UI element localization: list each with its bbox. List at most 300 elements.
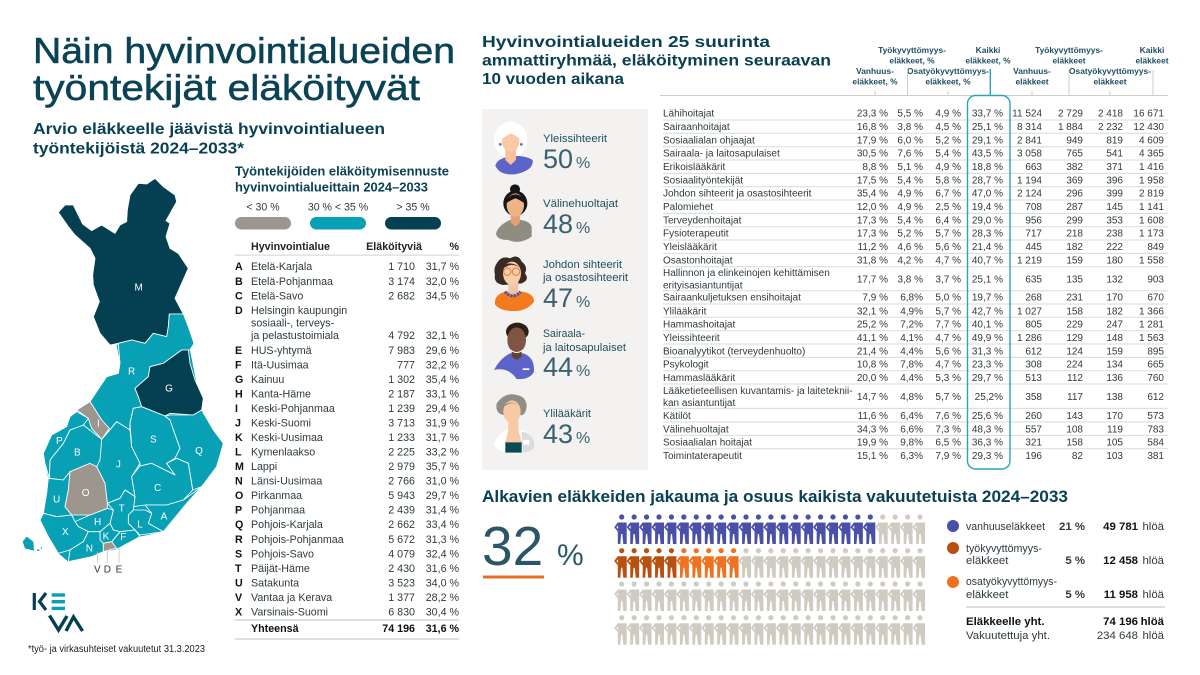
- map letters: B: [74, 448, 81, 459]
- row I: I: [235, 403, 238, 415]
- label: Yleissihteerit: [543, 133, 608, 145]
- label: Ylilääkärit: [543, 408, 592, 420]
- row S: 4 079: [388, 548, 415, 560]
- row N: 2 766: [388, 476, 415, 488]
- row: Bioanalyytikot (terveydenhuolto): [663, 346, 805, 357]
- title: [33, 30, 455, 108]
- row F: Itä-Uusimaa: [251, 360, 309, 372]
- row: Terveydenhoitajat: [663, 215, 742, 226]
- row: 40,1 %: [972, 320, 1003, 331]
- row: 268: [1025, 293, 1042, 304]
- row J: Keski-Suomi: [251, 418, 311, 430]
- row: [663, 149, 1164, 160]
- row: 612: [1025, 346, 1042, 357]
- row: 573: [1147, 411, 1164, 422]
- row I: [235, 403, 459, 415]
- value: %: [576, 155, 590, 172]
- item: partial disability: 11 958: [1104, 589, 1138, 601]
- map letters: O: [82, 488, 90, 499]
- row H: Kanta-Häme: [251, 388, 311, 400]
- row P: Pohjanmaa: [251, 505, 305, 517]
- row: 29,7 %: [972, 373, 1003, 384]
- row: 1 286: [1017, 333, 1042, 344]
- row K: 1 233: [388, 432, 415, 444]
- row: 12,0 %: [857, 202, 888, 213]
- row: 2,5 %: [935, 202, 961, 213]
- row: 43,5 %: [972, 149, 1003, 160]
- totals: [966, 616, 1165, 642]
- row: 41,1 %: [857, 333, 888, 344]
- row O: O: [235, 490, 243, 502]
- row: Psykologit: [663, 360, 709, 371]
- row: 105: [1106, 438, 1123, 449]
- row D: 4 792: [388, 330, 415, 342]
- value: 44: [543, 352, 573, 382]
- map letters: M: [135, 283, 143, 294]
- row: [663, 320, 1164, 331]
- row B: [235, 276, 459, 288]
- row: 7,6 %: [897, 149, 923, 160]
- southern silhouette: [40, 314, 223, 562]
- column headers: eläkkeet: [1135, 56, 1169, 66]
- row: 25,1 %: [972, 274, 1003, 285]
- heading: left section: [33, 121, 385, 158]
- table header: Eläköityviä: [366, 241, 422, 253]
- column headers: eläkkeet: [1093, 76, 1127, 86]
- row: 19,7 %: [972, 293, 1003, 304]
- column headers: Vanhuus-: [856, 66, 894, 76]
- row 1: old-age pensions: [614, 514, 925, 544]
- row I: 29,4 %: [426, 403, 459, 415]
- value: 47: [543, 283, 573, 313]
- item: partial disability: [947, 576, 1165, 601]
- row: 238: [1106, 229, 1123, 240]
- row: Lääketieteellisen kuvantamis- ja laiteteknii-: [663, 386, 853, 397]
- row H: [235, 388, 459, 400]
- row: 17,9 %: [857, 135, 888, 146]
- column headers: Työkyvyttömyys-: [1035, 45, 1103, 55]
- row: [663, 333, 1164, 344]
- row: 12 430: [1133, 122, 1164, 133]
- heading: distribution: Alkavien eläkkeiden jakauma ja osuus kaikista vakuutetuista 2024–2033: [482, 488, 1068, 506]
- row: [663, 109, 1164, 120]
- region R: Pohjois-Pohjanmaa: [90, 314, 194, 432]
- value: 43: [543, 419, 573, 449]
- row: 956: [1025, 215, 1042, 226]
- row E: [235, 345, 459, 357]
- column headers: eläkkeet, %: [965, 56, 1011, 66]
- row: 5,2 %: [935, 135, 961, 146]
- region G: Kainuu: [135, 350, 203, 416]
- row E: 29,6 %: [426, 345, 459, 357]
- row: 369: [1066, 175, 1083, 186]
- row: 1 219: [1017, 255, 1042, 266]
- totals: hlöä: [1141, 616, 1165, 628]
- legend: percentage classes: 30 % < 35 %: [308, 202, 369, 214]
- item: partial disability: hlöä: [1142, 589, 1165, 601]
- row: [663, 451, 1164, 462]
- label: [542, 259, 629, 284]
- row M: 35,7 %: [426, 461, 459, 473]
- row: [663, 411, 1164, 422]
- row X: [235, 606, 459, 618]
- persona: Ylilääkärit: [494, 394, 592, 453]
- row: kan asiantuntijat: [663, 398, 735, 409]
- row: 6,4%: [900, 411, 923, 422]
- item: old-age: vanhuuseläkkeet: [966, 521, 1046, 533]
- title: työntekijät eläköityvät: [33, 67, 420, 108]
- row: 612: [1147, 392, 1164, 403]
- label: [542, 328, 627, 354]
- heading: occupational groups: [482, 34, 831, 88]
- row: 23,3 %: [972, 360, 1003, 371]
- row A: Etelä-Karjala: [251, 261, 312, 273]
- row: 5,1 %: [897, 162, 923, 173]
- regions in teal: [40, 407, 223, 562]
- value: [543, 283, 590, 313]
- row: 247: [1106, 320, 1123, 331]
- row: Palomiehet: [663, 202, 713, 213]
- row: Hallinnon ja elinkeinojen kehittämisen: [663, 268, 830, 279]
- row: 182: [1106, 306, 1123, 317]
- row: 819: [1106, 135, 1123, 146]
- row: 36,3 %: [972, 438, 1003, 449]
- row V: 28,2 %: [426, 592, 459, 604]
- row: 48,3 %: [972, 424, 1003, 435]
- row: 4,6 %: [897, 242, 923, 253]
- row: [663, 360, 1164, 371]
- row: 3,7 %: [935, 274, 961, 285]
- row: 135: [1066, 274, 1083, 285]
- row J: 31,9 %: [426, 418, 459, 430]
- row: 1 884: [1058, 122, 1083, 133]
- row: 5,7 %: [935, 229, 961, 240]
- table header: %: [449, 241, 459, 253]
- row I: 1 239: [388, 403, 415, 415]
- column headers: Osatyökyvyttömyys-: [907, 66, 989, 76]
- row F: 777: [397, 360, 415, 372]
- row D: D: [235, 305, 243, 317]
- row: 5,7 %: [935, 392, 961, 403]
- heading: left section: työntekijöistä 2024–2033*: [33, 140, 245, 158]
- row: 231: [1066, 293, 1083, 304]
- table header: Hyvinvointialue: [251, 241, 330, 253]
- Åland islands: [23, 537, 42, 551]
- row: 42,7 %: [972, 306, 1003, 317]
- map letters: C: [154, 483, 161, 494]
- row: 353: [1106, 215, 1123, 226]
- row P: P: [235, 505, 242, 517]
- row: 229: [1066, 320, 1083, 331]
- region O: Pirkanmaa: [65, 463, 107, 515]
- row: 132: [1106, 274, 1123, 285]
- leader lines: [97, 548, 119, 563]
- row: 895: [1147, 346, 1164, 357]
- row: 1 141: [1139, 202, 1164, 213]
- column headers: eläkkeet: [1015, 76, 1049, 86]
- row V: Vantaa ja Kerava: [251, 592, 332, 604]
- row: 158: [1066, 438, 1083, 449]
- table: wellbeing counties: [235, 241, 459, 640]
- row: 28,3 %: [972, 229, 1003, 240]
- row K: Keski-Uusimaa: [251, 432, 323, 444]
- row N: 31,0 %: [426, 476, 459, 488]
- row: Yleislääkärit: [663, 242, 717, 253]
- row L: [235, 447, 459, 459]
- value: %: [576, 294, 590, 311]
- map letters: F: [120, 532, 126, 543]
- label: ja osastosihteerit: [542, 272, 629, 284]
- row: [663, 438, 1164, 449]
- heading: forecast table: hyvinvointialueittain 2024–2033: [235, 180, 428, 194]
- column headers: eläkkeet, %: [852, 76, 898, 86]
- row: Sairaala- ja laitosapulaiset: [663, 149, 780, 160]
- row: 25,6 %: [972, 411, 1003, 422]
- map letters: G: [165, 384, 173, 395]
- row: Lähihoitajat: [663, 109, 714, 120]
- row: 138: [1106, 392, 1123, 403]
- map letters: L: [137, 520, 143, 531]
- capital region: [103, 542, 117, 552]
- row: erityisasiantuntijat: [663, 280, 743, 291]
- row: 308: [1025, 360, 1042, 371]
- row: 7,9 %: [935, 451, 961, 462]
- item: disability: hlöä: [1142, 555, 1165, 567]
- row H: 2 187: [388, 388, 415, 400]
- row: 23,3 %: [857, 109, 888, 120]
- row: 25,2 %: [857, 320, 888, 331]
- row B: 32,0 %: [426, 276, 459, 288]
- row B: B: [235, 276, 243, 288]
- row: 849: [1147, 242, 1164, 253]
- row: 2 418: [1098, 109, 1123, 120]
- row O: 29,7 %: [426, 490, 459, 502]
- row H: H: [235, 388, 243, 400]
- row: 4,9 %: [935, 162, 961, 173]
- row 3: [614, 581, 925, 611]
- row M: Lappi: [251, 461, 277, 473]
- map letters: V: [94, 564, 101, 575]
- row: Toimintaterapeutit: [663, 451, 742, 462]
- row: 34,3 %: [857, 424, 888, 435]
- map letters: D: [104, 564, 111, 575]
- row R: [235, 534, 459, 546]
- row: 7,9 %: [862, 293, 888, 304]
- row A: 31,7 %: [426, 261, 459, 273]
- row: 4,9%: [900, 306, 923, 317]
- row B: Etelä-Pohjanmaa: [251, 276, 333, 288]
- row U: 3 523: [388, 577, 415, 589]
- row: 17,5 %: [857, 175, 888, 186]
- column headers: [852, 45, 1169, 86]
- row L: Kymenlaakso: [251, 447, 315, 459]
- row L: L: [235, 447, 242, 459]
- persona: Sairaala- ja laitosapulaiset: [494, 323, 627, 382]
- row: Sosiaalialan hoitajat: [663, 438, 752, 449]
- row A: 1 710: [388, 261, 415, 273]
- row: [663, 424, 1164, 435]
- row C: 2 682: [388, 290, 415, 302]
- row: 4,7 %: [935, 360, 961, 371]
- row: 1 281: [1139, 320, 1164, 331]
- row: 8 314: [1017, 122, 1042, 133]
- row: 4,5 %: [935, 122, 961, 133]
- row: 17,7 %: [857, 274, 888, 285]
- row: 783: [1147, 424, 1164, 435]
- row: 25,2%: [975, 392, 1003, 403]
- row: Sosiaalityöntekijät: [663, 175, 743, 186]
- heading: forecast table: [235, 164, 449, 194]
- row: [663, 268, 1164, 291]
- persona: Johdon sihteerit: [494, 256, 629, 313]
- row: Välinehuoltajat: [663, 424, 729, 435]
- row: [663, 373, 1164, 384]
- row total: 31,6 %: [426, 623, 459, 635]
- row T: T: [235, 563, 242, 575]
- label: Johdon sihteerit: [543, 259, 623, 271]
- row N: [235, 476, 459, 488]
- map letters: [53, 283, 203, 575]
- legend: percentage classes: > 35 %: [396, 202, 430, 214]
- map letters: T: [119, 504, 125, 515]
- totals: Eläkkeelle yht.: [966, 616, 1045, 628]
- row: 6,3%: [900, 451, 923, 462]
- map letters: X: [62, 527, 69, 538]
- row: 1 608: [1139, 215, 1164, 226]
- row: 287: [1066, 202, 1083, 213]
- row: 541: [1106, 149, 1123, 160]
- row: 1 027: [1017, 306, 1042, 317]
- row K: K: [235, 432, 243, 444]
- map letters: H: [94, 517, 101, 528]
- big number: 32 %: %: [557, 539, 584, 572]
- column headers: Vanhuus-: [1013, 66, 1051, 76]
- row: 708: [1025, 202, 1042, 213]
- row S: Pohjois-Savo: [251, 548, 314, 560]
- row: Sosiaalialan ohjaajat: [663, 135, 755, 146]
- table: occupational groups: [663, 109, 1164, 462]
- row X: 6 830: [388, 606, 415, 618]
- row Q: Pohjois-Karjala: [251, 519, 323, 531]
- row: 33,7 %: [972, 109, 1003, 120]
- row: 11,2 %: [858, 242, 888, 253]
- row X: X: [235, 606, 243, 618]
- value: %: [576, 430, 590, 447]
- row: 665: [1147, 360, 1164, 371]
- row: 17,3 %: [857, 215, 888, 226]
- pictogram: 100 insured persons: [614, 514, 925, 645]
- row: 16,8 %: [857, 122, 888, 133]
- row: [663, 242, 1164, 253]
- row: [663, 306, 1164, 317]
- row: 4,9 %: [897, 189, 923, 200]
- map letters: U: [53, 494, 60, 505]
- row Q: Q: [235, 519, 243, 531]
- row Q: 33,4 %: [426, 519, 459, 531]
- row: 3,8 %: [897, 122, 923, 133]
- item: partial disability: eläkkeet: [966, 589, 1009, 601]
- row: 10,8 %: [857, 360, 888, 371]
- row X: Varsinais-Suomi: [251, 606, 328, 618]
- column headers: Osatyökyvyttömyys-: [1069, 66, 1151, 76]
- row: Osastonhoitajat: [663, 255, 733, 266]
- row F: 32,2 %: [426, 360, 459, 372]
- row: 170: [1106, 411, 1123, 422]
- row: 170: [1106, 293, 1123, 304]
- map letters: K: [103, 531, 110, 542]
- row J: [235, 418, 459, 430]
- value: [543, 419, 590, 449]
- row R: 31,3 %: [426, 534, 459, 546]
- row: 717: [1025, 229, 1042, 240]
- row D: [235, 305, 459, 342]
- row M: 2 979: [388, 461, 415, 473]
- row V: V: [235, 592, 243, 604]
- row: 35,4 %: [857, 189, 888, 200]
- row: Yleissihteerit: [663, 333, 720, 344]
- row C: [235, 290, 459, 302]
- row: 760: [1147, 373, 1164, 384]
- map letters: A: [161, 511, 168, 522]
- row C: Etelä-Savo: [251, 290, 303, 302]
- row: 765: [1066, 149, 1083, 160]
- row: [663, 255, 1164, 266]
- legend: percentage classes: < 30 %: [246, 202, 280, 214]
- row: 224: [1066, 360, 1083, 371]
- highlight: all pensions column: [968, 69, 1010, 469]
- heading: occupational groups: ammattiryhmää, eläköityminen seuraavan: [482, 52, 831, 70]
- row U: U: [235, 577, 243, 589]
- row: 6,0 %: [897, 135, 923, 146]
- row: 1 958: [1139, 175, 1164, 186]
- row: 103: [1106, 451, 1123, 462]
- row: 19,4 %: [972, 202, 1003, 213]
- row J: J: [235, 418, 241, 430]
- row: 49,9 %: [972, 333, 1003, 344]
- row: 1 558: [1139, 255, 1164, 266]
- row: 6,7 %: [935, 189, 961, 200]
- row V: [235, 592, 459, 604]
- row: 20,0 %: [857, 373, 888, 384]
- row: 670: [1147, 293, 1164, 304]
- row: 2 729: [1058, 109, 1083, 120]
- row R: Pohjois-Pohjanmaa: [251, 534, 344, 546]
- row: 180: [1106, 255, 1123, 266]
- row: 31,3 %: [972, 346, 1003, 357]
- row E: HUS-yhtymä: [251, 345, 312, 357]
- row C: 34,5 %: [426, 290, 459, 302]
- row G: 35,4 %: [426, 374, 459, 386]
- row: 40,7 %: [972, 255, 1003, 266]
- row O: 5 943: [388, 490, 415, 502]
- row: 30,5 %: [857, 149, 888, 160]
- row: [663, 122, 1164, 133]
- row: 358: [1025, 392, 1042, 403]
- row: 15,1 %: [857, 451, 888, 462]
- row G: 1 302: [388, 374, 415, 386]
- row L: 33,2 %: [426, 447, 459, 459]
- row: 445: [1025, 242, 1042, 253]
- value: %: [576, 220, 590, 237]
- row: 29,1 %: [972, 135, 1003, 146]
- row: Johdon sihteerit ja osastosihteerit: [663, 189, 812, 200]
- totals: Vakuutettuja yht.: [966, 630, 1050, 642]
- row: 260: [1025, 411, 1042, 422]
- row: 17,3 %: [857, 229, 888, 240]
- row X: 30,4 %: [426, 606, 459, 618]
- row: 7,2%: [900, 320, 923, 331]
- row N: N: [235, 476, 243, 488]
